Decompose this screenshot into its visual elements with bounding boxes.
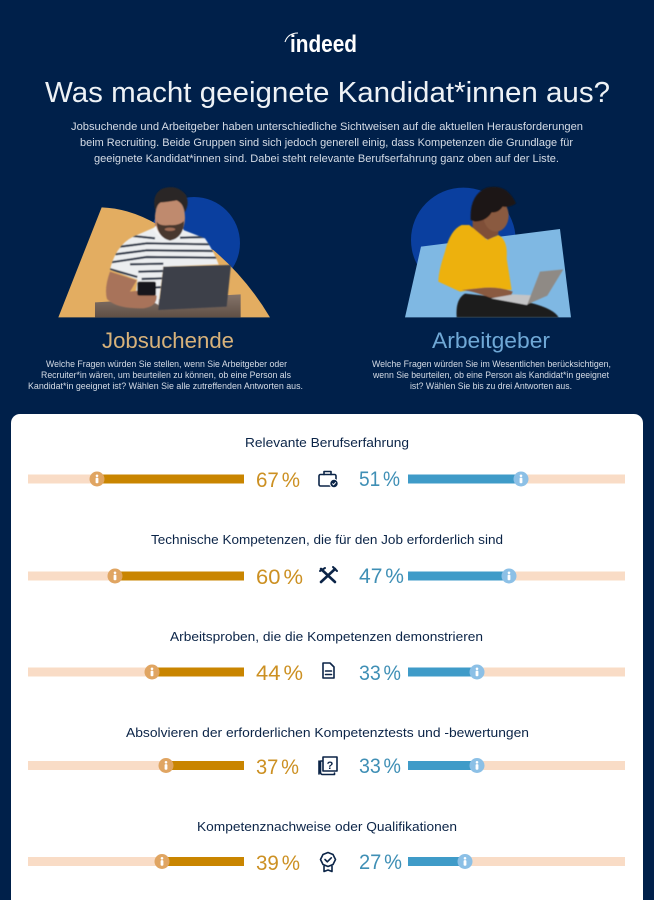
row: Kompetenznachweise bbox=[28, 819, 625, 875]
row: Relevante Berufserfahrung: Relevante Berufserfahrung bbox=[245, 435, 409, 450]
intro text bbox=[71, 121, 583, 165]
question: job seekers: Recruiter*in wären, um beurteilen zu können, ob eine Person als bbox=[41, 370, 291, 381]
illustration: job seeker with laptop bbox=[58, 187, 270, 317]
row: Relevante Berufserfahrung bbox=[28, 435, 625, 492]
intro text: geeignete Kandidat*innen sind. Dabei steht relevante Berufserfahrung ganz oben auf der Liste. bbox=[94, 153, 559, 165]
row: Technische Kompetenzen bbox=[28, 532, 625, 589]
row: Absolvieren der Kompetenztests bbox=[28, 725, 625, 779]
logo: indeed: indeed bbox=[290, 31, 357, 58]
row: Technische Kompetenzen: Technische Kompetenzen, die für den Job erforderlich sind bbox=[151, 532, 503, 547]
row: Kompetenznachweise: 39 % bbox=[256, 851, 300, 875]
row: Technische Kompetenzen: 60 % bbox=[256, 565, 303, 589]
intro text: beim Recruiting. Beide Gruppen sind sich jedoch generell einig, dass Kompetenzen die Grundlage für bbox=[80, 137, 573, 149]
row: Absolvieren der Kompetenztests: 33 % bbox=[359, 754, 401, 778]
question: employers bbox=[372, 359, 611, 392]
illustration: employer with laptop bbox=[405, 187, 571, 317]
question: job seekers: Kandidat*in geeignet ist? Wählen Sie alle zutreffenden Antworten aus. bbox=[28, 381, 303, 392]
title: Was macht geeignete Kandidat*innen aus? bbox=[45, 77, 610, 109]
row: Relevante Berufserfahrung: 67 % bbox=[256, 468, 300, 492]
question: employers: ist? Wählen Sie bis zu drei Antworten aus. bbox=[410, 381, 572, 392]
question: employers: Welche Fragen würden Sie im Wesentlichen berücksichtigen, bbox=[372, 359, 611, 370]
row: Absolvieren der Kompetenztests: ? bbox=[327, 760, 334, 772]
row: Absolvieren der Kompetenztests: Absolvieren der erforderlichen Kompetenztests und -bewertungen bbox=[126, 725, 529, 740]
heading: Arbeitgeber: Arbeitgeber bbox=[432, 328, 550, 353]
question: employers: wenn Sie beurteilen, ob eine Person als Kandidat*in geeignet bbox=[372, 370, 609, 381]
row: Arbeitsproben bbox=[28, 629, 625, 685]
row: Arbeitsproben: 44 % bbox=[256, 661, 303, 685]
row: Arbeitsproben: Arbeitsproben, die die Kompetenzen demonstrieren bbox=[170, 629, 483, 644]
question: job seekers bbox=[28, 359, 303, 392]
heading: Jobsuchende: Jobsuchende bbox=[102, 328, 234, 353]
row: Kompetenznachweise: 27 % bbox=[359, 850, 402, 874]
row: Absolvieren der Kompetenztests: 37 % bbox=[256, 755, 299, 779]
row: Kompetenznachweise: Kompetenznachweise oder Qualifikationen bbox=[197, 819, 457, 834]
row: Relevante Berufserfahrung: 51 % bbox=[359, 467, 400, 491]
intro text: Jobsuchende und Arbeitgeber haben unterschiedliche Sichtweisen auf die aktuellen Herausforderungen bbox=[71, 121, 583, 133]
row: Technische Kompetenzen: 47 % bbox=[359, 564, 404, 588]
question: job seekers: Welche Fragen würden Sie stellen, wenn Sie Arbeitgeber oder bbox=[46, 359, 287, 370]
row: Arbeitsproben: 33 % bbox=[359, 661, 401, 685]
panel: results bbox=[11, 414, 643, 900]
